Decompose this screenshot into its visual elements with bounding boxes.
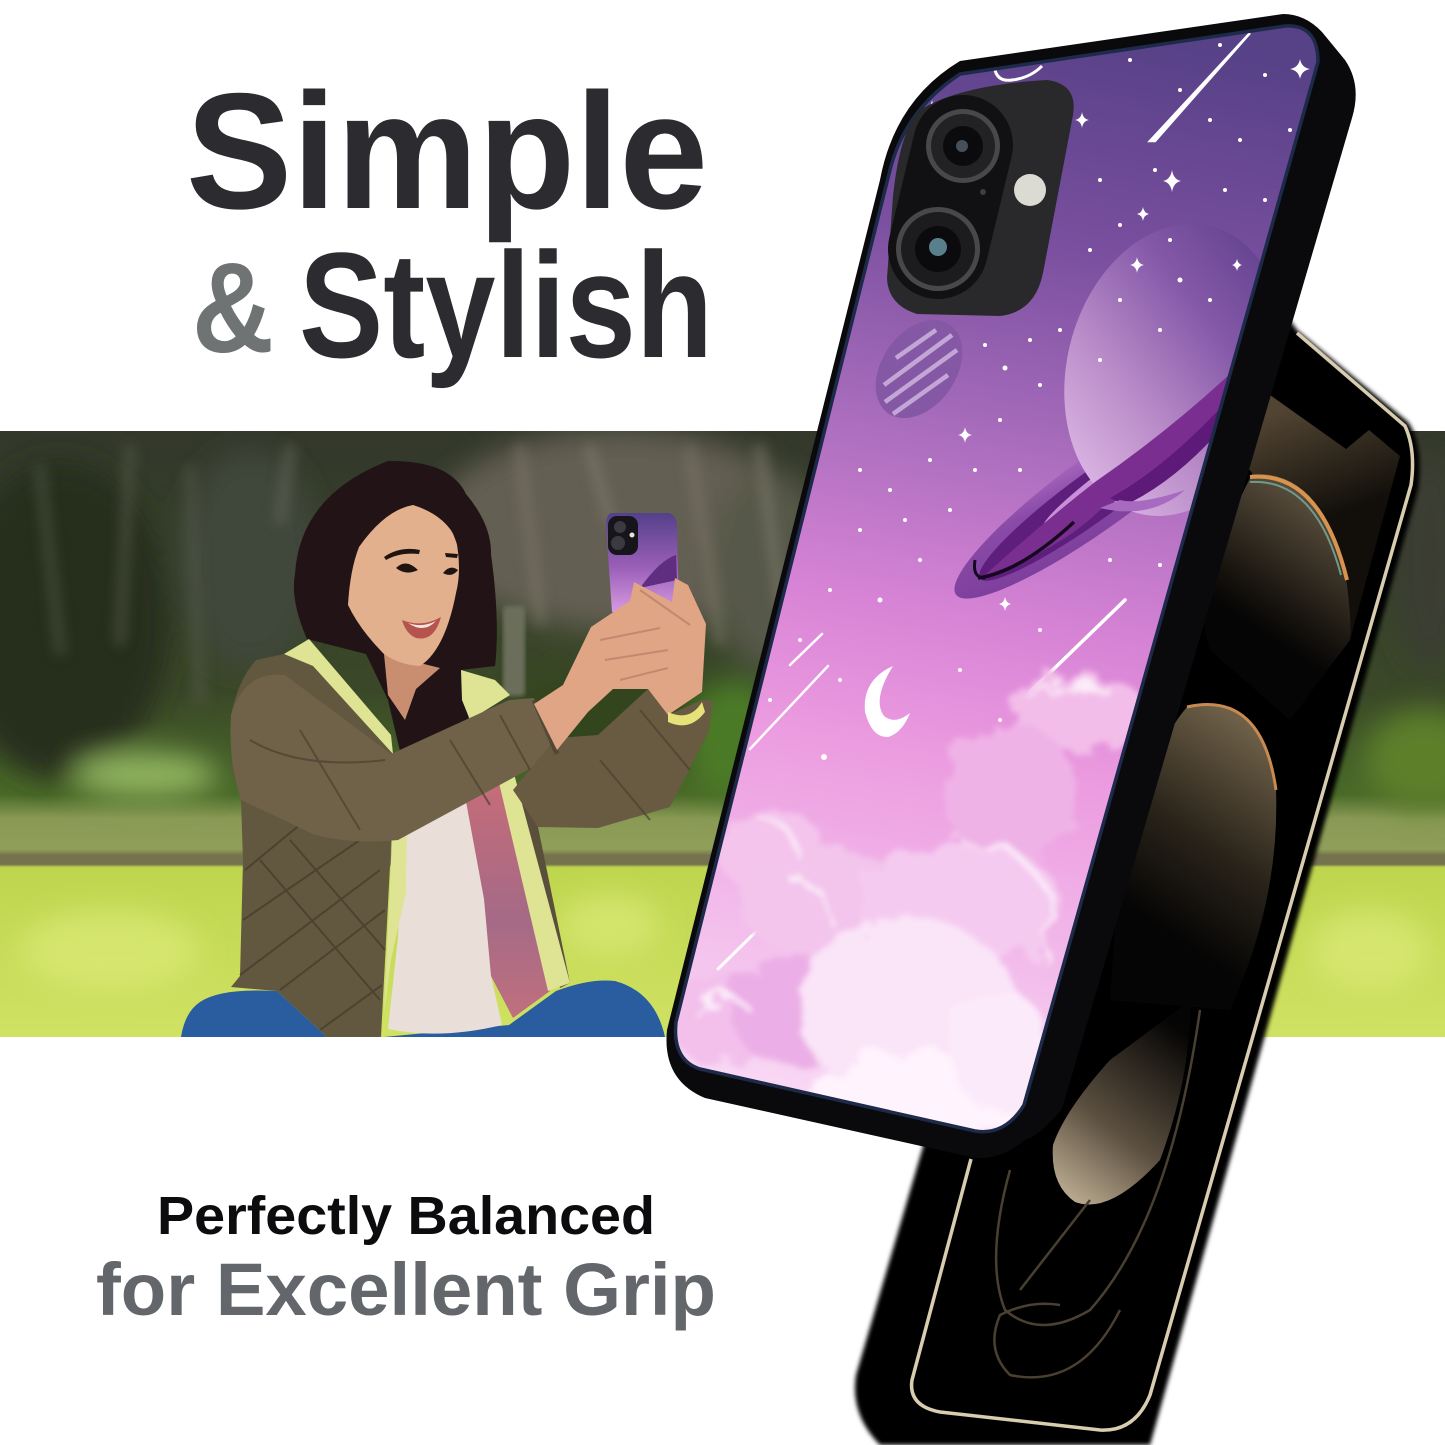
meteors	[718, 33, 1250, 969]
grass highlights	[20, 895, 1430, 990]
neck	[384, 654, 440, 720]
tagline line 1: Perfectly Balanced	[157, 1186, 655, 1246]
crescent moon	[865, 666, 910, 737]
blurred tree trunks	[40, 450, 780, 700]
tagline line 2: for Excellent Grip	[96, 1248, 716, 1331]
hair front right	[452, 531, 497, 665]
cloud bright rims	[690, 684, 1110, 1010]
jacket quilting	[240, 826, 386, 1030]
jacket right side	[522, 804, 570, 988]
lamp post	[503, 606, 525, 696]
arm stitch lines	[250, 700, 690, 830]
plaid shirt	[466, 785, 550, 1018]
faint wallpaper lines	[994, 1010, 1200, 1377]
back phone: black with gold frame	[855, 320, 1420, 1445]
back phone body	[855, 320, 1420, 1445]
lower bulge	[1053, 1000, 1191, 1204]
clouds	[670, 677, 1152, 1140]
upper lens	[926, 109, 1000, 183]
microphone dot	[980, 189, 986, 195]
small striped planet	[876, 320, 962, 418]
blue case edge highlight	[676, 26, 1318, 1132]
far arm	[513, 689, 713, 828]
near arm	[230, 674, 557, 842]
mouth	[402, 617, 441, 639]
rainbow inner edge	[1250, 482, 1341, 575]
photo band: woman in park	[0, 430, 1445, 1037]
flash	[1014, 174, 1046, 206]
yellow collar lining	[284, 639, 570, 1014]
hands	[534, 578, 706, 750]
gold frame edge	[912, 333, 1413, 1430]
screen wallpaper	[677, 28, 1316, 1130]
jeans	[181, 980, 665, 1037]
saturn planet	[1064, 230, 1260, 516]
finger lines	[600, 590, 690, 680]
lower lens	[896, 207, 980, 291]
saturn rings back	[954, 462, 1132, 599]
four-point stars	[925, 59, 1310, 611]
woman	[181, 461, 713, 1037]
jacket torso	[231, 654, 393, 1037]
camera bump	[887, 80, 1074, 316]
eyebrows and eyes	[384, 549, 458, 575]
small phone in hand	[606, 513, 679, 612]
shirt	[388, 803, 502, 1034]
stars	[768, 43, 1292, 760]
rainbow arc	[1250, 477, 1347, 580]
yellow watch	[668, 702, 705, 725]
saturn ring front	[974, 372, 1240, 578]
case body	[666, 14, 1356, 1158]
title: Simple & Stylish	[186, 59, 713, 389]
lower wallpaper dome	[1110, 705, 1276, 1010]
dark lens module	[938, 145, 963, 249]
face	[348, 505, 459, 666]
heading line: Stylish: Stylish	[299, 221, 713, 389]
ampersand: &	[192, 237, 274, 380]
hair back	[294, 461, 497, 760]
park background	[0, 430, 1445, 1037]
upper wallpaper dome	[1195, 474, 1350, 720]
heading line: Simple: Simple	[186, 59, 708, 243]
screen glow below notch	[1240, 395, 1400, 640]
tagline	[96, 1186, 716, 1331]
front phone case	[650, 0, 1356, 1160]
dome highlight	[1187, 705, 1276, 790]
planet outline near top	[995, 66, 1042, 80]
